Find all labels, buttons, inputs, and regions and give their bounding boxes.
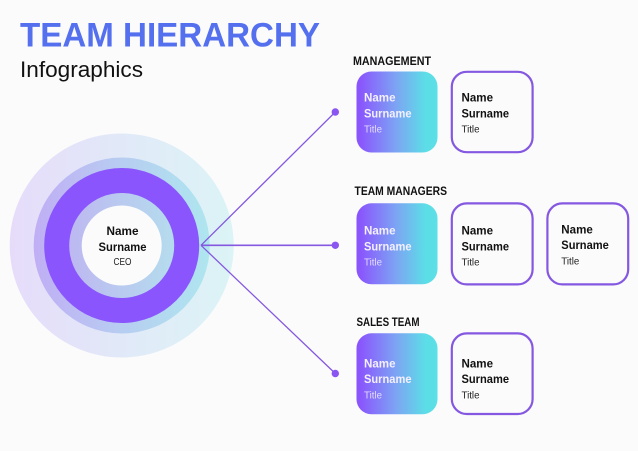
card: management outline xyxy=(452,72,533,152)
card: team managers gradient: Title xyxy=(364,257,382,269)
card: sales team gradient: Name xyxy=(364,356,396,370)
card: sales team gradient: Surname xyxy=(364,372,412,386)
card: team managers outline 1 xyxy=(452,203,533,284)
card: management gradient: Title xyxy=(364,124,382,136)
card: team managers outline 2: Title xyxy=(561,256,579,268)
card: sales team outline: Name xyxy=(462,356,493,370)
card: sales team outline: Surname xyxy=(462,372,509,386)
CEO surname: Surname xyxy=(98,240,147,254)
card: team managers outline 1: Name xyxy=(462,224,493,238)
card: sales team gradient: Title xyxy=(364,390,382,402)
connector lines xyxy=(201,108,339,377)
card: team managers outline 1: Title xyxy=(462,257,480,269)
CEO title: CEO xyxy=(114,257,132,268)
card: management outline: Surname xyxy=(462,106,509,120)
card: management gradient: Surname xyxy=(364,106,412,120)
card: sales team gradient xyxy=(356,333,438,414)
card: team managers outline 1: Surname xyxy=(462,239,509,253)
card: team managers outline 2 xyxy=(547,203,628,284)
card: management gradient: Name xyxy=(364,91,396,105)
card: team managers gradient xyxy=(356,203,438,284)
heading: team managers: TEAM MANAGERS xyxy=(354,184,447,198)
title: TEAM HIERARCHY xyxy=(20,16,320,54)
card: management outline: Title xyxy=(462,124,480,136)
card: management outline: Name xyxy=(462,91,493,105)
heading: management: MANAGEMENT xyxy=(353,54,432,68)
card: team managers outline 2: Surname xyxy=(561,238,609,252)
concentric circles: CEO xyxy=(10,134,234,358)
card: team managers gradient: Surname xyxy=(364,239,412,253)
card: sales team outline xyxy=(452,333,533,414)
CEO name: Name xyxy=(106,224,139,238)
subtitle: Infographics xyxy=(20,57,143,82)
card: team managers gradient: Name xyxy=(364,224,396,238)
card: management gradient xyxy=(356,72,438,152)
card: team managers outline 2: Name xyxy=(561,222,593,236)
heading: sales team: SALES TEAM xyxy=(356,315,420,329)
card: sales team outline: Title xyxy=(462,390,480,402)
